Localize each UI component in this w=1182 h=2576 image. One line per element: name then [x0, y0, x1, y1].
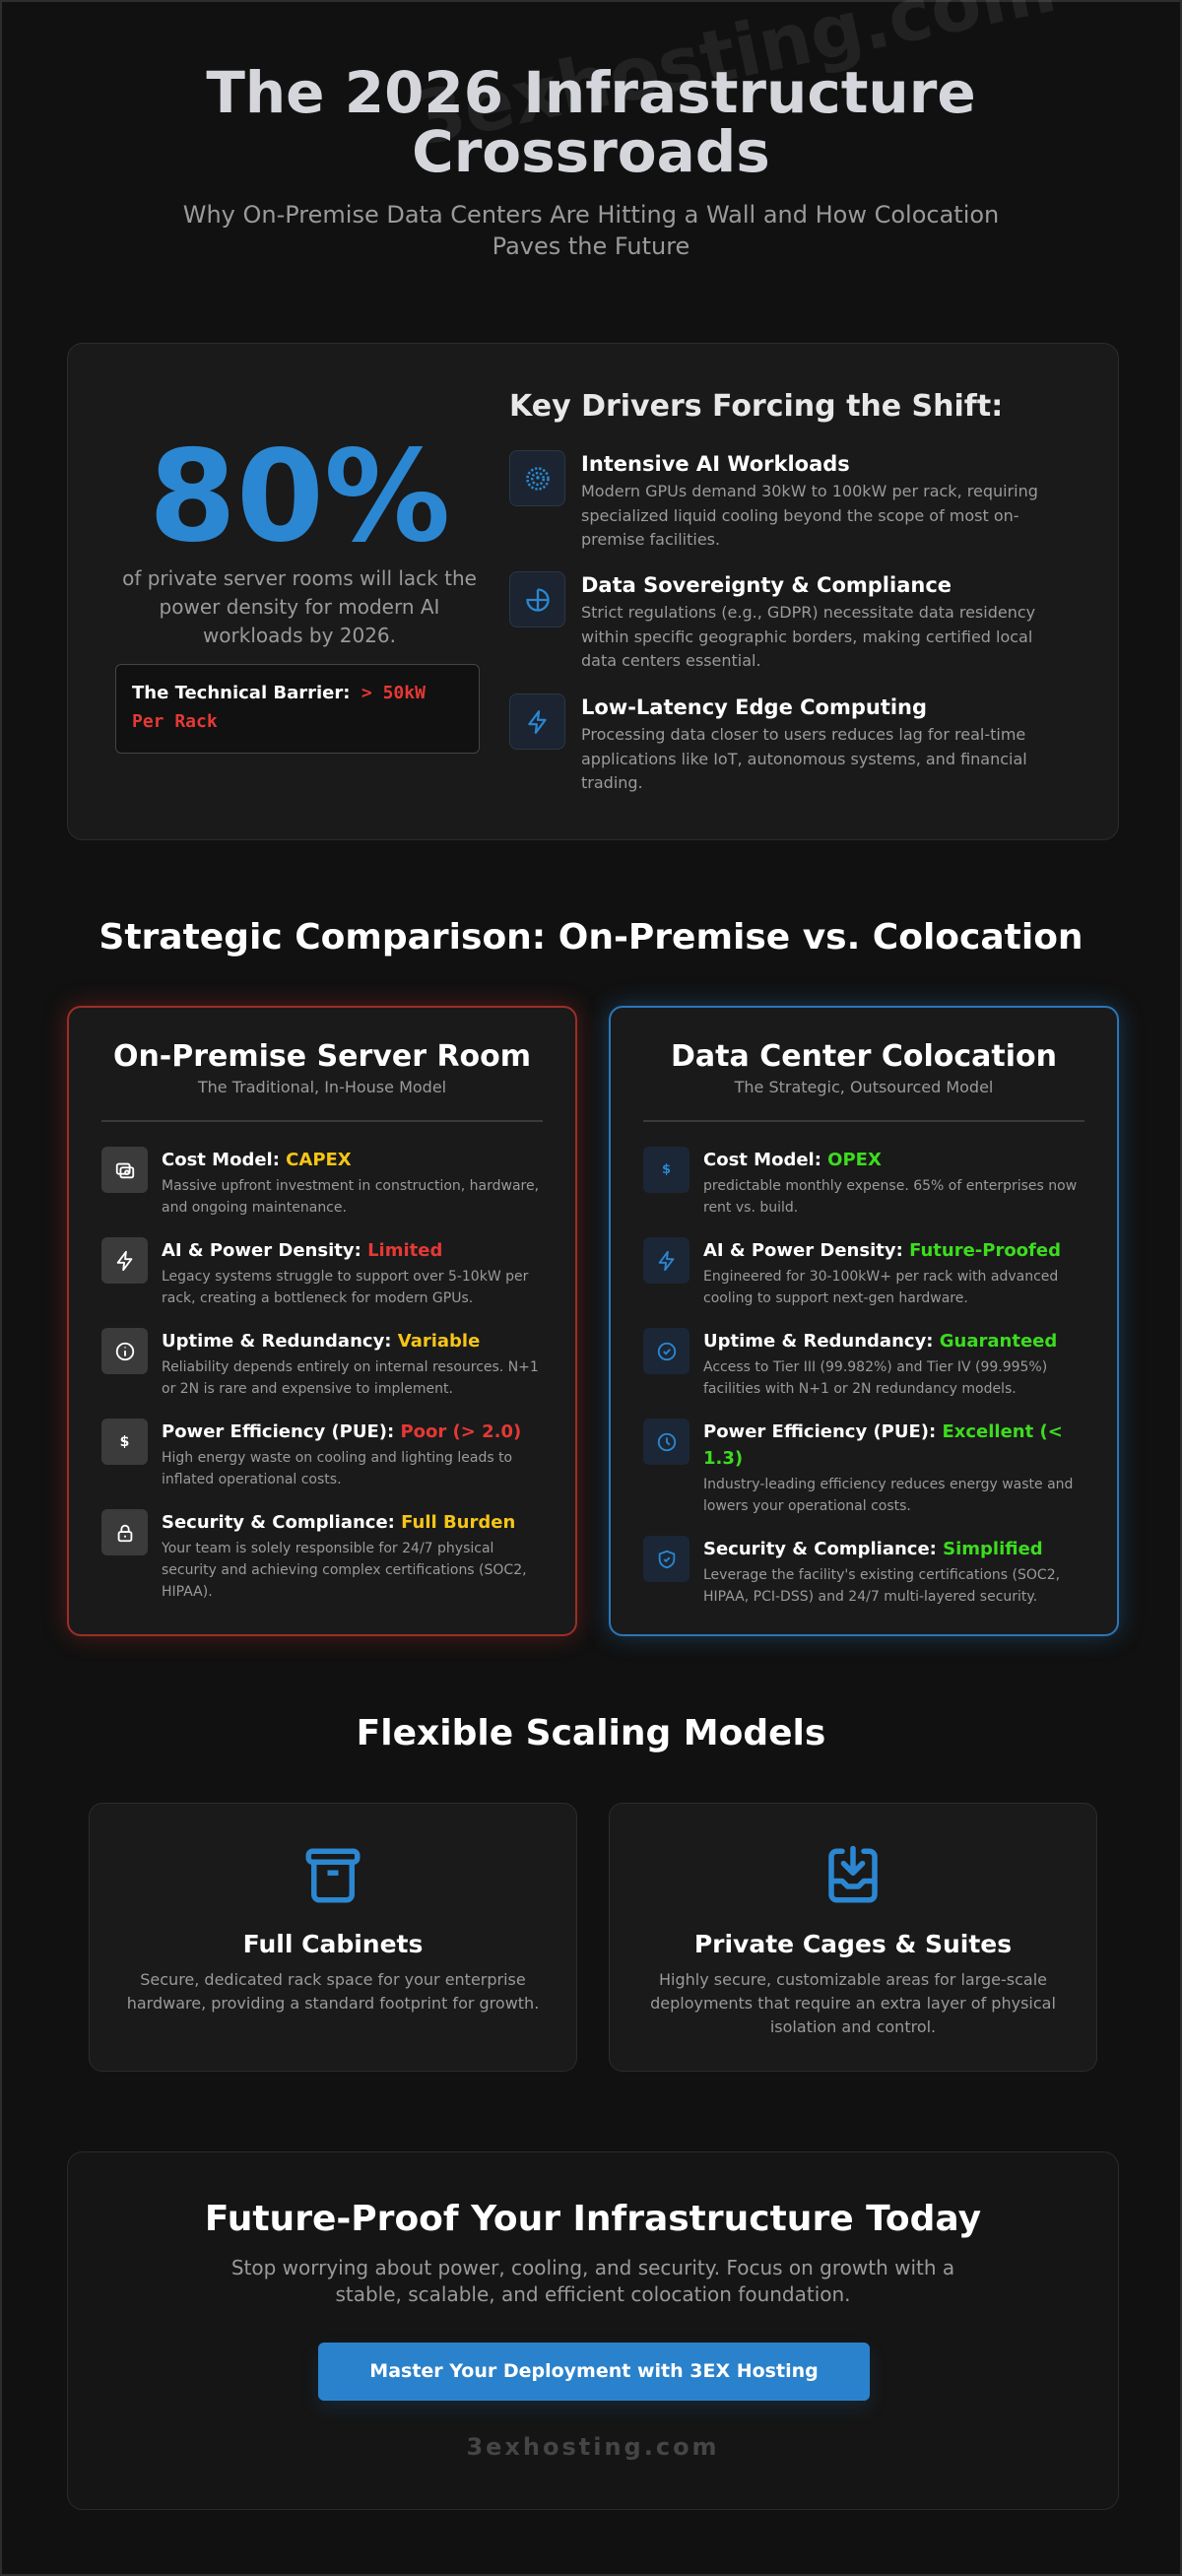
driver: sovereignty — [509, 571, 1035, 670]
panel: colocation — [609, 1006, 1119, 1636]
item: security — [101, 1509, 527, 1600]
driver: edge: Processing data closer to users reduces lag for real-time applications like IoT, autonomous systems, and financial trading. — [581, 725, 1027, 792]
panel: colocation: The Strategic, Outsourced Model — [735, 1078, 993, 1096]
item: PUE: $ — [120, 1434, 129, 1450]
icon: pie — [509, 571, 565, 627]
icon: bolt — [509, 694, 565, 750]
item: PUE: Power Efficiency (PUE): Excellent (< 1.3) — [703, 1421, 1063, 1469]
card title: Full Cabinets — [243, 1930, 423, 1958]
subtitle: Why On-Premise Data Centers Are Hitting a Wall and How Colocation — [183, 201, 999, 229]
technical barrier box — [115, 664, 480, 754]
title — [206, 59, 976, 185]
item: power: Engineered for 30-100kW+ per rack with advanced cooling to support next-gen hardware. — [703, 1269, 1058, 1306]
driver: AI workloads: Intensive AI Workloads — [581, 452, 850, 476]
drivers heading: Key Drivers Forcing the Shift: — [509, 389, 1003, 424]
icon: archive — [305, 1848, 361, 1903]
driver: edge: Low-Latency Edge Computing — [581, 695, 927, 719]
item: PUE — [101, 1419, 521, 1487]
card title: Private Cages & Suites — [694, 1930, 1012, 1958]
item: uptime — [643, 1328, 1057, 1397]
item: power: AI & Power Density: Limited — [162, 1240, 442, 1261]
card title: On-Premise Server Room — [113, 1039, 531, 1074]
item: power — [101, 1237, 528, 1306]
item: security: Security & Compliance: Simplified — [703, 1539, 1043, 1559]
item: uptime: Reliability depends entirely on internal resources. N+1 or 2N is rare and expensive to implement. — [162, 1359, 539, 1397]
panel: on-premise — [67, 1006, 577, 1636]
item: PUE: High energy waste on cooling and lighting leads to inflated operational costs. — [162, 1450, 512, 1487]
CTA button — [318, 2343, 870, 2401]
driver: edge — [509, 694, 1027, 792]
item: cost — [643, 1147, 1077, 1216]
item: uptime — [101, 1328, 539, 1397]
subtitle — [183, 201, 999, 260]
driver: sovereignty: Data Sovereignty & Compliance — [581, 573, 952, 597]
item: security: Your team is solely responsible for 24/7 physical security and achieving complex certifications (SOC2, HIPAA). — [162, 1541, 527, 1600]
item: cost: Cost Model: OPEX — [703, 1150, 882, 1170]
item: uptime: Uptime & Redundancy: Variable — [162, 1331, 480, 1352]
stat caption: of private server rooms will lack the power density for modern AI workloads by 2026. — [122, 566, 477, 647]
item: cost: Cost Model: CAPEX — [162, 1150, 352, 1170]
subtitle: Paves the Future — [492, 232, 690, 260]
panel: full cabinets — [89, 1803, 577, 2072]
technical barrier box: The Technical Barrier: > 50kW Per Rack — [132, 683, 426, 732]
item: uptime: Access to Tier III (99.982%) and Tier IV (99.995%) facilities with N+1 or 2N redundancy models. — [703, 1359, 1047, 1397]
item: power: Legacy systems struggle to support over 5-10kW per rack, creating a bottleneck for modern GPUs. — [162, 1269, 528, 1306]
CTA text: Stop worrying about power, cooling, and security. Focus on growth with a stable, scalable, and efficient colocation foundation. — [231, 2256, 954, 2306]
driver: AI workloads — [509, 450, 1038, 549]
card text: Secure, dedicated rack space for your enterprise hardware, providing a standard footprint for growth. — [127, 1970, 539, 2013]
card text: Highly secure, customizable areas for large-scale deployments that require an extra layer of physical isolation and control. — [650, 1970, 1056, 2036]
title: Crossroads — [412, 118, 770, 185]
panel: CTA — [67, 2151, 1119, 2510]
panel: on-premise: The Traditional, In-House Model — [198, 1078, 446, 1096]
card title: Data Center Colocation — [671, 1039, 1057, 1074]
section heading: scaling: Flexible Scaling Models — [357, 1713, 825, 1753]
item: cost — [101, 1147, 539, 1216]
big stat: 80% — [149, 424, 450, 570]
driver: sovereignty: Strict regulations (e.g., GDPR) necessitate data residency within specific geographic borders, making certified local data centers essential. — [581, 603, 1035, 670]
item: uptime: Uptime & Redundancy: Guaranteed — [703, 1331, 1057, 1352]
item: security — [643, 1536, 1060, 1605]
item: cost: Massive upfront investment in construction, hardware, and ongoing maintenance. — [162, 1178, 539, 1216]
CTA button: Master Your Deployment with 3EX Hosting — [369, 2360, 819, 2382]
item: PUE — [643, 1419, 1073, 1514]
item: power: AI & Power Density: Future-Proofed — [703, 1240, 1061, 1261]
item: security: Leverage the facility's existing certifications (SOC2, HIPAA, PCI-DSS) and 24/7 multi-layered security. — [703, 1567, 1060, 1605]
icon: AI chip — [509, 450, 565, 506]
footer brand: 3exhosting.com — [466, 2433, 720, 2461]
item: power — [643, 1237, 1061, 1306]
driver: AI workloads: Modern GPUs demand 30kW to 100kW per rack, requiring specialized liquid cooling beyond the scope of most on-premise facilities. — [581, 482, 1038, 549]
section heading: comparison: Strategic Comparison: On-Premise vs. Colocation — [98, 917, 1084, 958]
panel: stats and drivers — [67, 343, 1119, 840]
item: cost: $ — [662, 1162, 671, 1177]
item: security: Security & Compliance: Full Burden — [162, 1512, 515, 1533]
title: The 2026 Infrastructure — [206, 59, 976, 126]
item: PUE: Power Efficiency (PUE): Poor (> 2.0) — [162, 1421, 521, 1442]
CTA heading: Future-Proof Your Infrastructure Today — [205, 2199, 981, 2239]
panel: private cages — [609, 1803, 1097, 2072]
icon: inbox download — [828, 1846, 878, 1903]
item: PUE: Industry-leading efficiency reduces energy waste and lowers your operational costs. — [703, 1477, 1073, 1514]
item: cost: predictable monthly expense. 65% of enterprises now rent vs. build. — [703, 1178, 1077, 1216]
